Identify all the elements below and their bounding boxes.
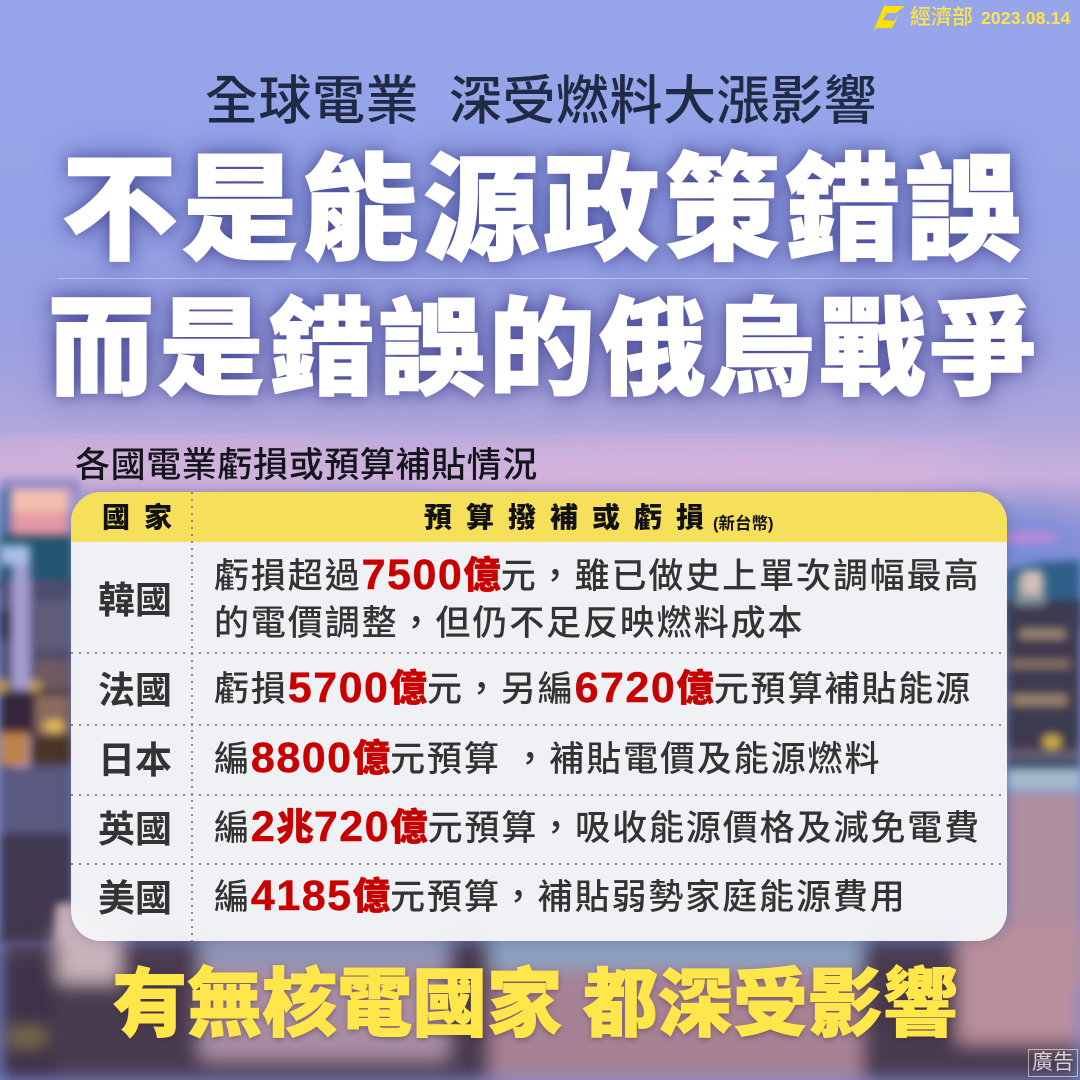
description: UK: 編2兆720億元預算，吸收能源價格及減免電費 xyxy=(214,803,981,851)
subtitle: 全球電業 深受燃料大漲影響 xyxy=(205,72,877,131)
bottom yellow conclusion: 有無核電國家 都深受影響 xyxy=(112,962,958,1046)
country: UK: 英國 xyxy=(98,809,172,850)
country: Korea: 韓國 xyxy=(98,580,172,621)
description: Korea xyxy=(214,551,980,643)
title line 2: 而是錯誤的俄烏戰爭 xyxy=(48,291,1040,409)
ad label: 廣告 xyxy=(1032,1051,1074,1074)
row: UK xyxy=(98,803,981,851)
row: USA xyxy=(98,872,907,920)
header logo and date xyxy=(873,6,1071,32)
description: Japan: 編8800億元預算 ，補貼電價及能源燃料 xyxy=(214,734,881,782)
description: France: 虧損5700億元，另編6720億元預算補貼能源 xyxy=(214,664,972,712)
title divider xyxy=(58,278,1028,279)
country: Japan: 日本 xyxy=(98,740,172,781)
description: Korea: 的電價調整，但仍不足反映燃料成本 xyxy=(214,604,804,643)
title line 1: 不是能源政策錯誤 xyxy=(62,145,1026,275)
header: budget or loss: 預算撥補或虧損(新台幣) xyxy=(424,502,774,533)
description: Korea: 虧損超過7500億元，雖已做史上單次調幅最高 xyxy=(214,551,980,599)
ministry name and date: 經濟部 2023.08.14 xyxy=(910,6,1071,29)
description: USA: 編4185億元預算，補貼弱勢家庭能源費用 xyxy=(214,872,907,920)
ad label xyxy=(1028,1049,1078,1077)
country: USA: 美國 xyxy=(98,878,172,919)
row: France xyxy=(98,664,972,712)
table caption: 各國電業虧損或預算補貼情況 xyxy=(75,446,538,485)
header: country: 國家 xyxy=(102,502,186,533)
row: Japan xyxy=(98,734,881,782)
table header xyxy=(71,492,1007,542)
row: Korea xyxy=(98,551,980,643)
icon: ministry logo xyxy=(873,6,905,32)
table panel xyxy=(71,492,1007,941)
column divider xyxy=(191,492,193,941)
country: France: 法國 xyxy=(98,670,172,711)
